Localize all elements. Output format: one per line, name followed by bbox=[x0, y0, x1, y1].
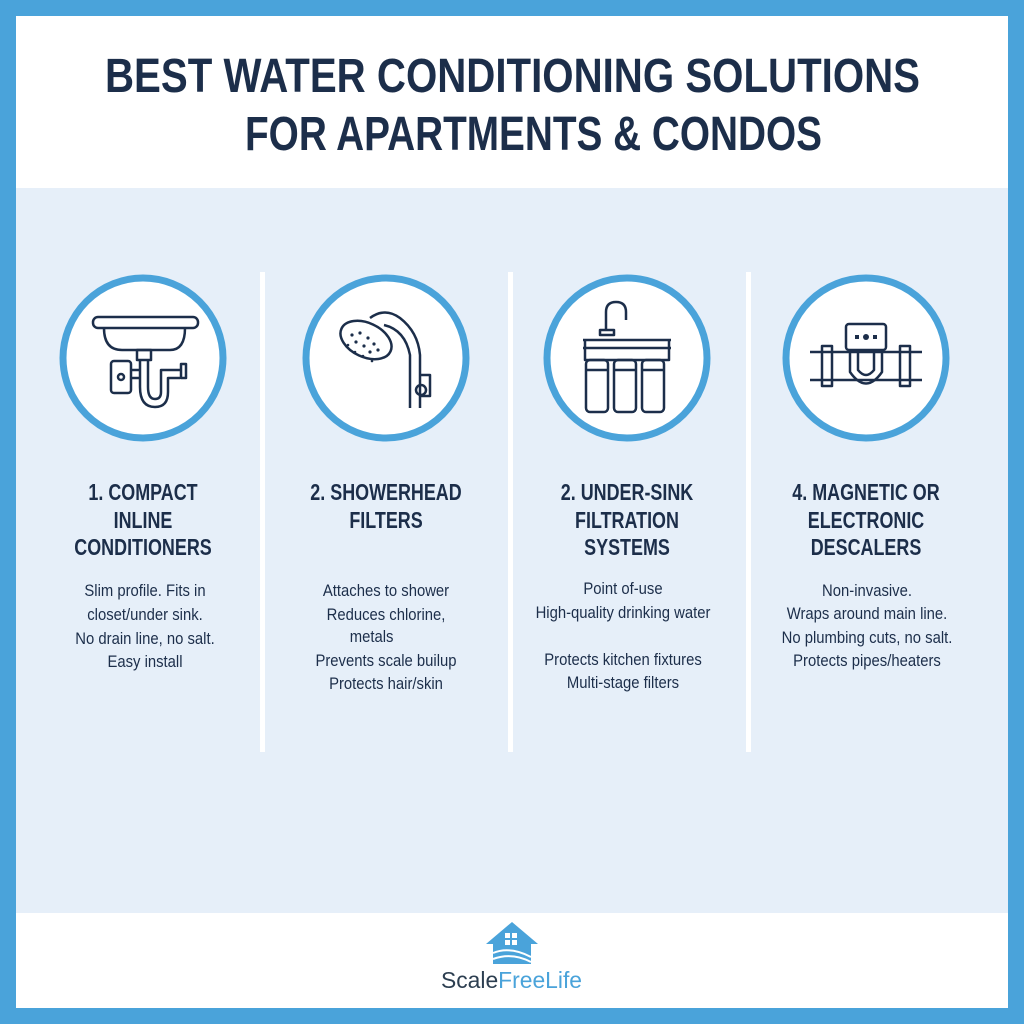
icon: house bbox=[486, 922, 538, 964]
text block: Slim profile. Fits in bbox=[84, 582, 206, 600]
text block bbox=[315, 582, 457, 693]
icon: under-sink filters bbox=[547, 278, 707, 438]
heading: 2. UNDER-SINK bbox=[561, 480, 693, 506]
panel: magnetic descalers bbox=[782, 278, 952, 670]
text block bbox=[536, 580, 710, 692]
heading: FILTRATION bbox=[575, 508, 679, 534]
text block: Protects pipes/heaters bbox=[793, 652, 941, 670]
text block: Protects kitchen fixtures bbox=[544, 651, 702, 669]
heading bbox=[310, 480, 462, 534]
text block bbox=[75, 582, 215, 671]
logo: ScaleFreeLife bbox=[441, 922, 582, 993]
text block: Easy install bbox=[107, 653, 183, 671]
text block: Attaches to shower bbox=[323, 582, 449, 600]
brand text: ScaleFreeLife bbox=[441, 967, 582, 993]
text block: Multi-stage filters bbox=[567, 674, 679, 692]
heading: CONDITIONERS bbox=[74, 535, 212, 561]
dividers bbox=[260, 272, 751, 752]
heading bbox=[74, 480, 212, 561]
text block: Wraps around main line. bbox=[787, 605, 947, 623]
heading: DESCALERS bbox=[811, 535, 921, 561]
icon: descaler on pipe bbox=[786, 278, 946, 438]
title bbox=[105, 50, 920, 161]
heading bbox=[792, 480, 940, 561]
text block: High-quality drinking water bbox=[536, 604, 710, 622]
heading: INLINE bbox=[114, 508, 172, 534]
text block: No plumbing cuts, no salt. bbox=[782, 629, 952, 647]
icon: showerhead bbox=[306, 278, 466, 438]
panel: showerhead filters bbox=[306, 278, 466, 693]
heading: 4. MAGNETIC OR bbox=[792, 480, 940, 506]
heading: ELECTRONIC bbox=[808, 508, 924, 534]
heading bbox=[561, 480, 693, 561]
heading: 1. COMPACT bbox=[88, 480, 198, 506]
text block: Point of-use bbox=[583, 580, 663, 598]
title: FOR APARTMENTS & CONDOS bbox=[245, 108, 822, 161]
text block: Prevents scale builup bbox=[315, 652, 457, 670]
icon: sink with inline conditioner bbox=[63, 278, 223, 438]
panel: compact inline conditioners bbox=[63, 278, 223, 671]
text block: closet/under sink. bbox=[87, 606, 203, 624]
text block: Non-invasive. bbox=[822, 582, 912, 600]
text block: metals bbox=[350, 628, 394, 646]
text block: No drain line, no salt. bbox=[75, 630, 215, 648]
content panel background bbox=[16, 188, 1008, 913]
text block: Protects hair/skin bbox=[329, 675, 443, 693]
text block bbox=[782, 582, 952, 670]
text block: Reduces chlorine, bbox=[327, 606, 445, 624]
heading: 2. SHOWERHEAD bbox=[310, 480, 462, 506]
heading: SYSTEMS bbox=[584, 535, 670, 561]
panel: under-sink filtration bbox=[536, 278, 710, 692]
heading: FILTERS bbox=[349, 508, 423, 534]
